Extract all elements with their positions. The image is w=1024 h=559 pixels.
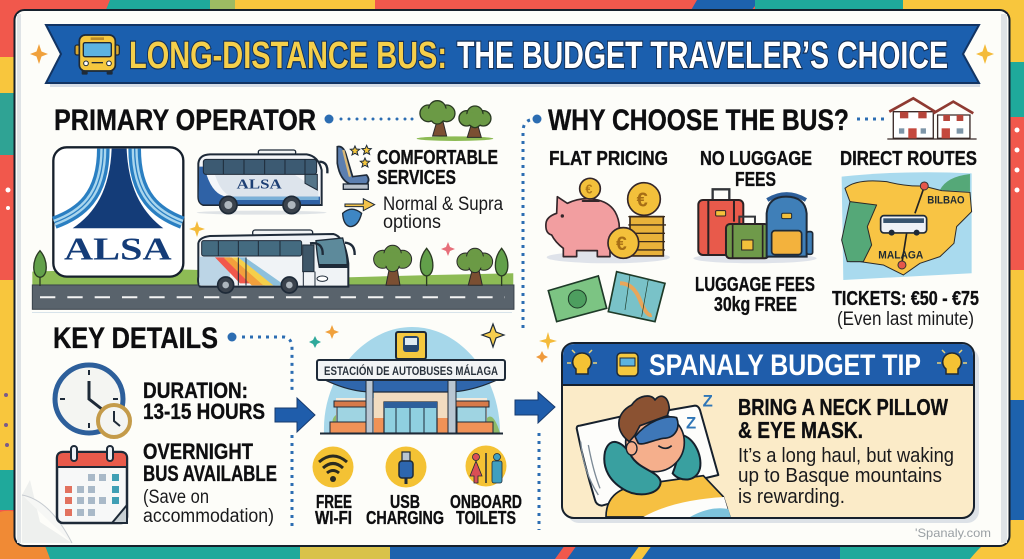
text: comfortable services: SERVICES bbox=[377, 167, 456, 189]
icon: piggy bank and coins bbox=[546, 178, 670, 263]
text: luggage allowance: LUGGAGE FEES bbox=[695, 274, 815, 296]
amenity: usb charging bbox=[366, 446, 444, 528]
tip text bbox=[738, 394, 954, 508]
sparkles bbox=[189, 221, 455, 256]
subheading: direct routes: DIRECT ROUTES bbox=[840, 148, 977, 170]
text: ticket price bbox=[832, 288, 979, 330]
text: duration: DURATION: bbox=[143, 378, 248, 403]
panel: key details bbox=[53, 322, 315, 528]
title text bbox=[129, 35, 948, 77]
text: comfortable services: COMFORTABLE bbox=[377, 147, 498, 169]
map of Spain with route bbox=[842, 172, 972, 280]
icon: ALSA logo bbox=[53, 147, 183, 277]
text: overnight bus bbox=[143, 439, 277, 527]
station sign bbox=[317, 360, 505, 380]
text: ticket price: (Even last minute) bbox=[837, 309, 974, 330]
connector: dotted path to station bbox=[228, 332, 292, 528]
icon: piggy bank and coins: € bbox=[637, 190, 648, 212]
heading: key details: KEY DETAILS bbox=[53, 322, 218, 355]
icon: piggy bank and coins: € bbox=[585, 182, 592, 196]
sparkle decorations on the banner sides bbox=[30, 44, 994, 64]
heading: primary operator: PRIMARY OPERATOR bbox=[54, 104, 316, 137]
heading: why choose the bus: WHY CHOOSE THE BUS? bbox=[548, 104, 849, 137]
amenity: usb charging: USB bbox=[390, 492, 420, 512]
amenity: onboard toilets bbox=[450, 446, 522, 528]
connector: heading dots bbox=[324, 114, 414, 124]
map labels bbox=[878, 194, 965, 261]
station sign: ESTACIÓN DE AUTOBUSES MÁLAGA bbox=[324, 363, 498, 378]
divider under operator section bbox=[32, 312, 512, 313]
amenity: free wi-fi: FREE bbox=[316, 492, 352, 512]
connector: vertical dotted line bbox=[523, 114, 884, 332]
icon: bus in tip header bbox=[617, 353, 638, 376]
subheading: flat pricing: FLAT PRICING bbox=[549, 148, 668, 170]
watermark: 'Spanaly.com bbox=[915, 526, 991, 540]
icon: lightbulb left bbox=[567, 350, 597, 374]
panel: Spanaly budget tip bbox=[562, 343, 979, 523]
subheading: no luggage fees: NO LUGGAGE bbox=[700, 148, 812, 170]
sparkles above tip box bbox=[536, 332, 557, 363]
text: overnight bus: accommodation) bbox=[143, 506, 274, 527]
icon: luggage set bbox=[693, 189, 817, 263]
text: luggage allowance: 30kg FREE bbox=[714, 294, 797, 316]
amenity: usb charging: CHARGING bbox=[366, 508, 444, 528]
icon: large rainbow coach bbox=[198, 230, 355, 293]
column: flat pricing bbox=[546, 148, 670, 322]
text: overnight bus: BUS AVAILABLE bbox=[143, 461, 277, 486]
title text: LONG-DISTANCE BUS: bbox=[129, 35, 447, 77]
text: duration: 13-15 HOURS bbox=[143, 399, 265, 424]
map labels: MALAGA bbox=[878, 249, 923, 261]
amenity: onboard toilets: TOILETS bbox=[456, 508, 516, 528]
icon: Basque houses bbox=[887, 98, 977, 139]
connector: dotted line beside tip box bbox=[538, 433, 540, 530]
amenity: free wi-fi: WI-FI bbox=[315, 508, 352, 528]
tip text: BRING A NECK PILLOW bbox=[738, 394, 948, 420]
tip text: up to Basque mountains bbox=[738, 465, 942, 487]
text: normal and supra options: options bbox=[383, 212, 441, 233]
sparkles bbox=[309, 324, 504, 348]
logo wordmark: ALSA bbox=[64, 230, 172, 266]
title banner bbox=[46, 25, 980, 87]
road scene bbox=[32, 245, 514, 309]
text: luggage allowance bbox=[695, 274, 815, 316]
icon: yellow bus bbox=[75, 35, 119, 75]
icon: reclining seat with stars bbox=[337, 145, 371, 189]
sleep z letters: Z bbox=[686, 413, 696, 432]
subheading: no luggage fees bbox=[700, 148, 812, 191]
panel: bus station bbox=[309, 324, 555, 528]
icon: calendar bbox=[57, 446, 127, 523]
sleep z letters bbox=[686, 392, 713, 432]
icon: small ALSA coach bbox=[197, 150, 327, 215]
icon: two trees bbox=[417, 101, 493, 141]
tip text: & EYE MASK. bbox=[738, 417, 863, 443]
arrow: to station bbox=[275, 398, 315, 432]
panel: why choose the bus bbox=[523, 98, 979, 332]
text: ticket price: TICKETS: €50 - €75 bbox=[832, 288, 979, 310]
column: no luggage fees bbox=[693, 148, 817, 316]
text: normal and supra options bbox=[383, 194, 503, 233]
icon: clock bbox=[55, 365, 130, 437]
arrow: to budget tip bbox=[515, 392, 555, 423]
text: duration bbox=[143, 378, 265, 424]
subheading: no luggage fees: FEES bbox=[735, 169, 776, 191]
tip title: SPANALY BUDGET TIP bbox=[649, 349, 921, 382]
cypress trees bbox=[34, 248, 508, 286]
illustration: sleeping traveler bbox=[577, 392, 731, 517]
amenity: onboard toilets: ONBOARD bbox=[450, 492, 522, 512]
illustration: station building bbox=[320, 327, 503, 434]
tip text: It’s a long haul, but waking bbox=[738, 445, 954, 467]
sleep z letters: Z bbox=[703, 392, 713, 411]
amenity: free wi-fi bbox=[312, 446, 354, 528]
map labels: BILBAO bbox=[927, 194, 965, 206]
icon: banknote and map bbox=[548, 272, 665, 322]
text: overnight bus: (Save on bbox=[143, 487, 209, 508]
column: direct routes bbox=[832, 148, 979, 330]
round trees bbox=[374, 245, 493, 285]
icon: arrow and eye mask bbox=[343, 199, 375, 227]
icon: lightbulb right bbox=[937, 350, 967, 374]
text: normal and supra options: Normal & Supra bbox=[383, 194, 503, 215]
text: overnight bus: OVERNIGHT bbox=[143, 439, 253, 464]
panel: primary operator bbox=[32, 101, 514, 309]
tip text: is rewarding. bbox=[738, 486, 845, 508]
icon: small ALSA coach: ALSA bbox=[237, 177, 282, 192]
text: comfortable services bbox=[377, 147, 498, 189]
icon: bus stop sign bbox=[396, 332, 426, 359]
map bus bbox=[881, 216, 927, 236]
icon: piggy bank and coins: € bbox=[616, 234, 627, 255]
